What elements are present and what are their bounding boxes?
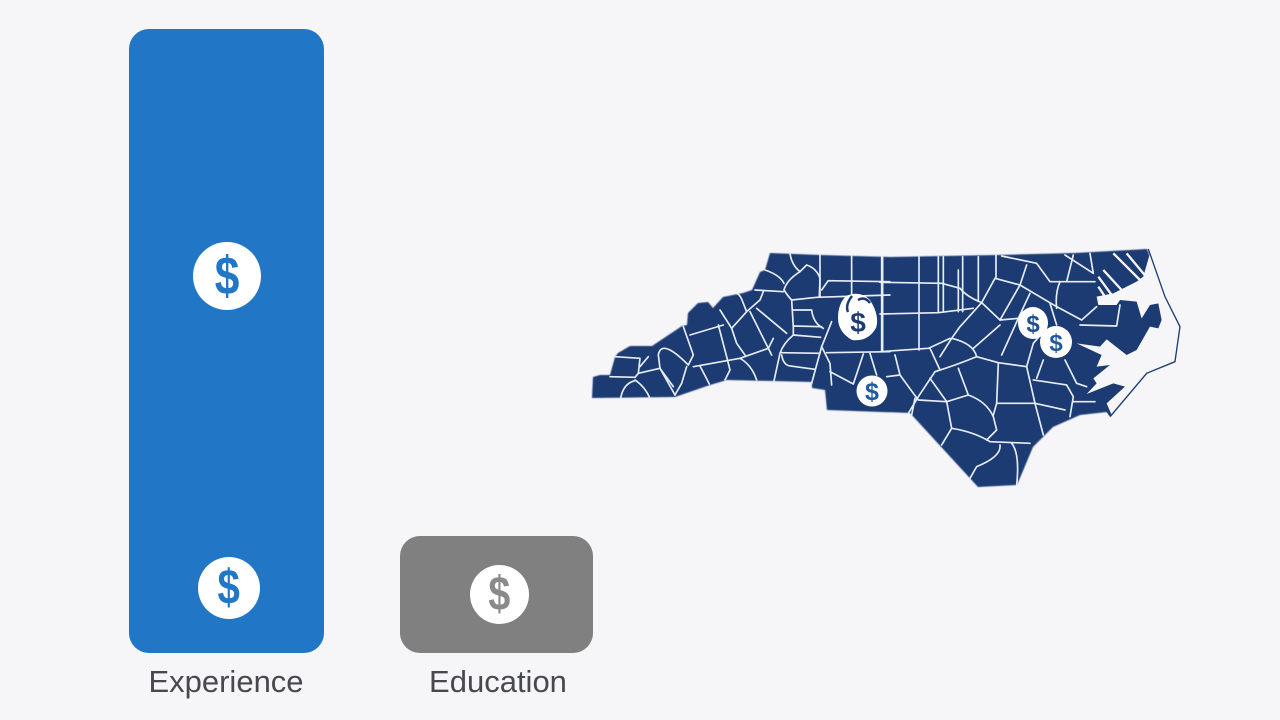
icon: lower dollar coin <box>198 557 260 619</box>
label: Experience: Experience <box>148 664 304 699</box>
map pin: central west <box>838 294 877 340</box>
icon: lower dollar coin: $ <box>218 561 240 615</box>
map pin: east one: $ <box>1026 311 1040 338</box>
northern sound fingers <box>1098 253 1152 297</box>
county lines: west <box>610 253 890 398</box>
county lines: east <box>880 253 1120 485</box>
map pin: east two <box>1040 326 1072 358</box>
map pin: central west: $ <box>850 307 866 338</box>
icon: grey dollar coin <box>470 565 529 624</box>
icon: upper dollar coin: $ <box>215 246 239 306</box>
bar: Education <box>400 536 593 653</box>
outer banks line <box>1107 249 1180 416</box>
map pin: east two: $ <box>1049 330 1063 357</box>
map pin: east one <box>1018 307 1048 339</box>
bar: Experience <box>129 29 324 653</box>
sounds and outer banks <box>1077 249 1182 416</box>
map pin: south central: $ <box>865 378 879 406</box>
icon: upper dollar coin <box>193 242 261 310</box>
icon: grey dollar coin: $ <box>489 568 510 621</box>
label: Education: Education <box>429 664 567 699</box>
Albemarle and Pamlico sounds <box>1077 253 1182 415</box>
state silhouette <box>592 249 1180 487</box>
map pin: south central <box>856 376 888 406</box>
